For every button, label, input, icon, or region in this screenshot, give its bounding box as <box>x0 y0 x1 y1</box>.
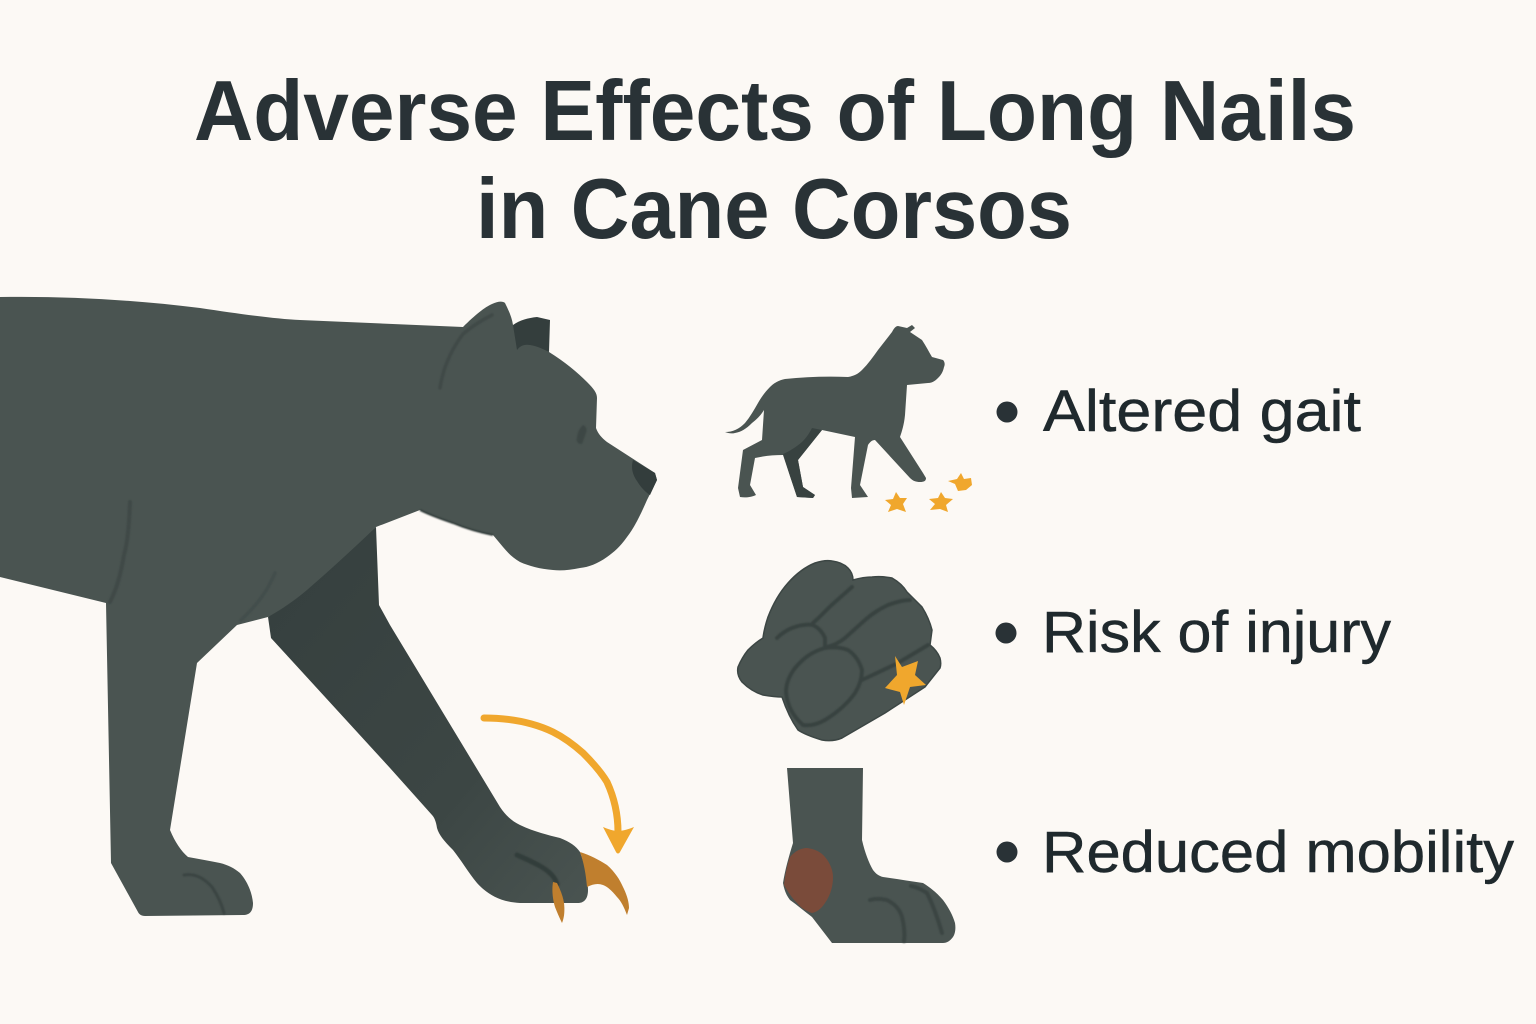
toe creases <box>870 886 942 941</box>
bullet: altered gait: Altered gait <box>1043 379 1361 444</box>
injury star <box>885 656 926 705</box>
title <box>194 64 1356 257</box>
title: in Cane Corsos <box>476 162 1072 257</box>
nose <box>632 460 657 495</box>
toe creases <box>777 587 928 725</box>
neck shadow <box>420 510 493 535</box>
stars <box>885 473 972 512</box>
ear crease <box>440 315 492 388</box>
toe lines <box>184 875 224 913</box>
ear fold <box>513 317 550 352</box>
sore spot <box>784 848 833 913</box>
dog silhouette <box>725 325 945 498</box>
icon: sore leg <box>783 768 955 943</box>
bullet: risk of injury: Risk of injury <box>1042 600 1391 665</box>
dog body and head <box>0 297 657 916</box>
bullet: reduced mobility: Reduced mobility <box>1042 820 1514 885</box>
leg shape <box>783 768 955 943</box>
far front leg <box>268 527 588 903</box>
far hind leg shadow <box>783 428 822 498</box>
body creases <box>110 502 130 602</box>
curved arrow <box>484 718 634 854</box>
main dog illustration <box>0 297 657 916</box>
icon: walking dog with stars <box>725 325 972 512</box>
title: Adverse Effects of Long Nails <box>194 64 1356 159</box>
eye <box>577 425 587 444</box>
paw shape <box>738 561 941 741</box>
long nails <box>552 852 629 923</box>
icon: injured paw <box>738 561 941 741</box>
